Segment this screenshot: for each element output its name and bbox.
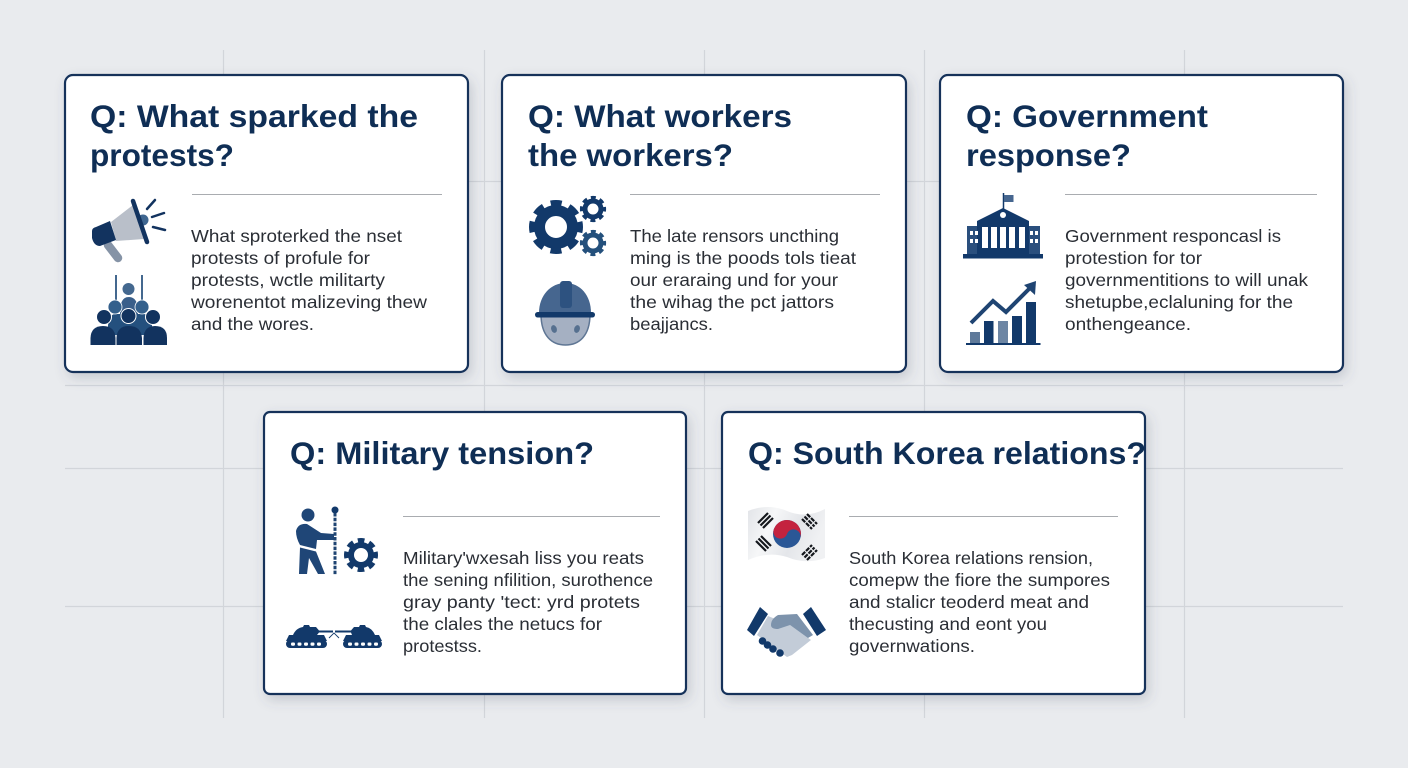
heading: what sparked the protests [90, 98, 418, 173]
heading: south korea relations: Q: South Korea relations? [748, 435, 1146, 471]
heading: what workers the workers: the workers? [528, 137, 733, 173]
icon: crowd [90, 275, 167, 345]
body text: Government responcasl is [1065, 226, 1281, 246]
body text: ming is the poods tols tieat [630, 248, 856, 268]
body text: shetupbe,eclaluning for the [1065, 292, 1293, 312]
body text: and stalicr teoderd meat and [849, 592, 1089, 612]
panel: what sparked the protests [65, 75, 468, 372]
heading: what sparked the protests: Q: What sparked the [90, 98, 418, 134]
body text: governwations. [849, 636, 975, 656]
heading: government response: response? [966, 137, 1131, 173]
body text: onthengeance. [1065, 314, 1191, 334]
body text: gray panty 'tect: yrd protets [403, 592, 640, 612]
icon: handshake [747, 607, 826, 657]
panel: government response [940, 75, 1343, 372]
body text: protests of profule for [191, 248, 370, 268]
heading: what workers the workers [528, 98, 792, 173]
body text: beajjancs. [630, 314, 713, 334]
heading: what sparked the protests: protests? [90, 137, 234, 173]
icon: megaphone [92, 200, 165, 258]
body text: South Korea relations rension, [849, 548, 1093, 568]
body text [190, 226, 427, 334]
body text: Military'wxesah liss you reats [403, 548, 644, 568]
body text [849, 548, 1110, 656]
heading: military tension: Q: Military tension? [290, 435, 594, 471]
icon: gears [532, 198, 604, 254]
icon: worker helmet [535, 281, 595, 345]
body text: the clales the netucs for [403, 614, 602, 634]
body text [1065, 226, 1308, 334]
icon: opposing tanks [286, 625, 382, 648]
body text: our eraraing und for your [630, 270, 838, 290]
panel: military tension [264, 412, 686, 694]
body text [630, 226, 856, 334]
body text: and the wores. [191, 314, 314, 334]
body text: comepw the fiore the sumpores [849, 570, 1110, 590]
body text: protestss. [403, 636, 482, 656]
body text: The late rensors uncthing [630, 226, 839, 246]
icon: government building [963, 193, 1043, 258]
body text: the wihag the pct jattors [630, 292, 834, 312]
icon: soldier with pole and gear [296, 506, 376, 575]
body text [403, 548, 653, 656]
icon: rising bar chart [966, 281, 1040, 345]
panel: south korea relations [722, 412, 1146, 694]
icon: south korea flag [748, 507, 825, 561]
body text: protestion for tor [1065, 248, 1202, 268]
body text: the sening nfilition, surothence [403, 570, 653, 590]
body text: What sproterked the nset [191, 226, 402, 246]
heading: government response: Q: Government [966, 98, 1209, 134]
heading: government response [966, 98, 1209, 173]
panel: what workers the workers [502, 75, 906, 372]
body text: thecusting and eont you [849, 614, 1047, 634]
heading: what workers the workers: Q: What workers [528, 98, 792, 134]
body text: worenentot malizeving thew [190, 292, 427, 312]
body text: protests, wctle militarty [191, 270, 385, 290]
body text: governmentitions to will unak [1065, 270, 1308, 290]
